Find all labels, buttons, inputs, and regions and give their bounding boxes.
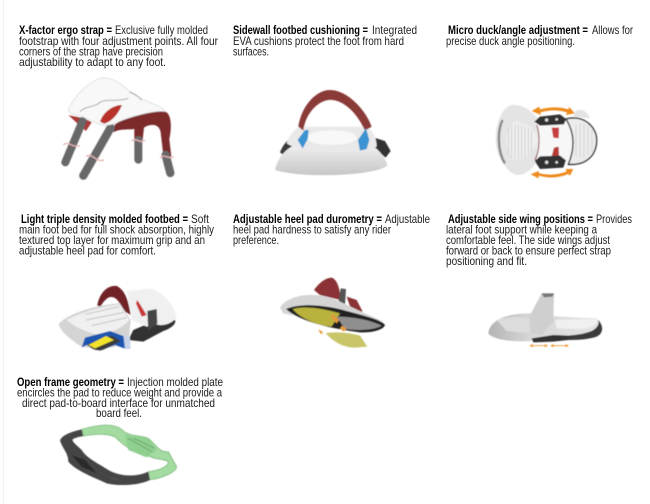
text: Adjustable heel pad durometry: Adjustable: [385, 212, 430, 226]
feature: Light triple density molded footbed: [19, 212, 214, 351]
arrows: side wing travel: [529, 344, 569, 347]
text: Micro duck/angle adjustment: Micro duck/angle adjustment =: [448, 23, 588, 37]
feature: Sidewall footbed cushioning: [233, 23, 417, 175]
text: Micro duck/angle adjustment: Allows for: [592, 23, 633, 37]
text: Light triple density molded footbed: Light triple density molded footbed =: [21, 212, 188, 226]
feature: Micro duck/angle adjustment: [446, 23, 633, 178]
text: X-factor ergo strap: Exclusive fully molded: [115, 23, 208, 37]
text: Adjustable side wing positions: Provides: [596, 212, 632, 226]
icon: duck angle illustration: [496, 105, 597, 178]
text: Adjustable side wing positions: comfortable feel. The side wings adjust: [446, 233, 611, 247]
text: Sidewall footbed cushioning: Sidewall footbed cushioning =: [233, 23, 368, 37]
text: Adjustable heel pad durometry: heel pad hardness to satisfy any rider: [233, 222, 391, 236]
text: X-factor ergo strap: corners of the strap have precision: [19, 44, 163, 58]
text: Sidewall footbed cushioning: Integrated: [372, 23, 417, 37]
text: Open frame geometry: Injection molded plate: [127, 375, 223, 389]
text: Adjustable heel pad durometry: preference.: [233, 233, 279, 247]
text: Light triple density molded footbed: textured top layer for maximum grip and an: [19, 233, 205, 247]
icon: side wing illustration: [488, 293, 602, 347]
text: Open frame geometry: encircles the pad to reduce weight and provide a: [17, 386, 222, 400]
text: Adjustable side wing positions: positioning and fit.: [446, 254, 527, 268]
arrows: rotation: [531, 107, 575, 178]
text: Light triple density molded footbed: adjustable heel pad for comfort.: [19, 244, 156, 258]
icon: open frame plate illustration: [60, 425, 177, 485]
text: Light triple density molded footbed: Soft: [191, 212, 210, 226]
icon: footbed cushioning illustration: [275, 90, 391, 175]
text: X-factor ergo strap: X-factor ergo strap =: [19, 23, 112, 37]
text: Adjustable side wing positions: forward or back to ensure perfect strap: [446, 244, 611, 258]
text: Open frame geometry: direct pad-to-board interface for unmatched: [22, 396, 215, 410]
text: Adjustable side wing positions: lateral foot support while keeping a: [446, 222, 597, 236]
text: Micro duck/angle adjustment: precise duck angle positioning.: [446, 34, 575, 48]
text: Adjustable heel pad durometry: Adjustable heel pad durometry =: [233, 212, 382, 226]
feature: Open frame geometry: [17, 375, 223, 485]
icon: heel pad illustration: [280, 278, 385, 348]
icon: footstrap illustration: [63, 78, 174, 176]
feature: Adjustable heel pad durometry: [233, 212, 430, 348]
feature: Adjustable side wing positions: [446, 212, 632, 347]
text: X-factor ergo strap: adjustability to adapt to any foot.: [19, 55, 166, 69]
icon: triple density footbed illustration: [59, 286, 177, 351]
text: Open frame geometry: Open frame geometry =: [17, 375, 124, 389]
text: Light triple density molded footbed: main foot bed for full shock absorption, highly: [19, 222, 214, 236]
text: Adjustable side wing positions: Adjustable side wing positions =: [448, 212, 593, 226]
text: Sidewall footbed cushioning: EVA cushions protect the foot from hard: [233, 34, 404, 48]
feature: X-factor ergo strap: [19, 23, 218, 176]
text: Sidewall footbed cushioning: surfaces.: [233, 44, 269, 58]
text: Open frame geometry: board feel.: [96, 406, 142, 420]
text: X-factor ergo strap: footstrap with four adjustment points. All four: [19, 34, 218, 48]
